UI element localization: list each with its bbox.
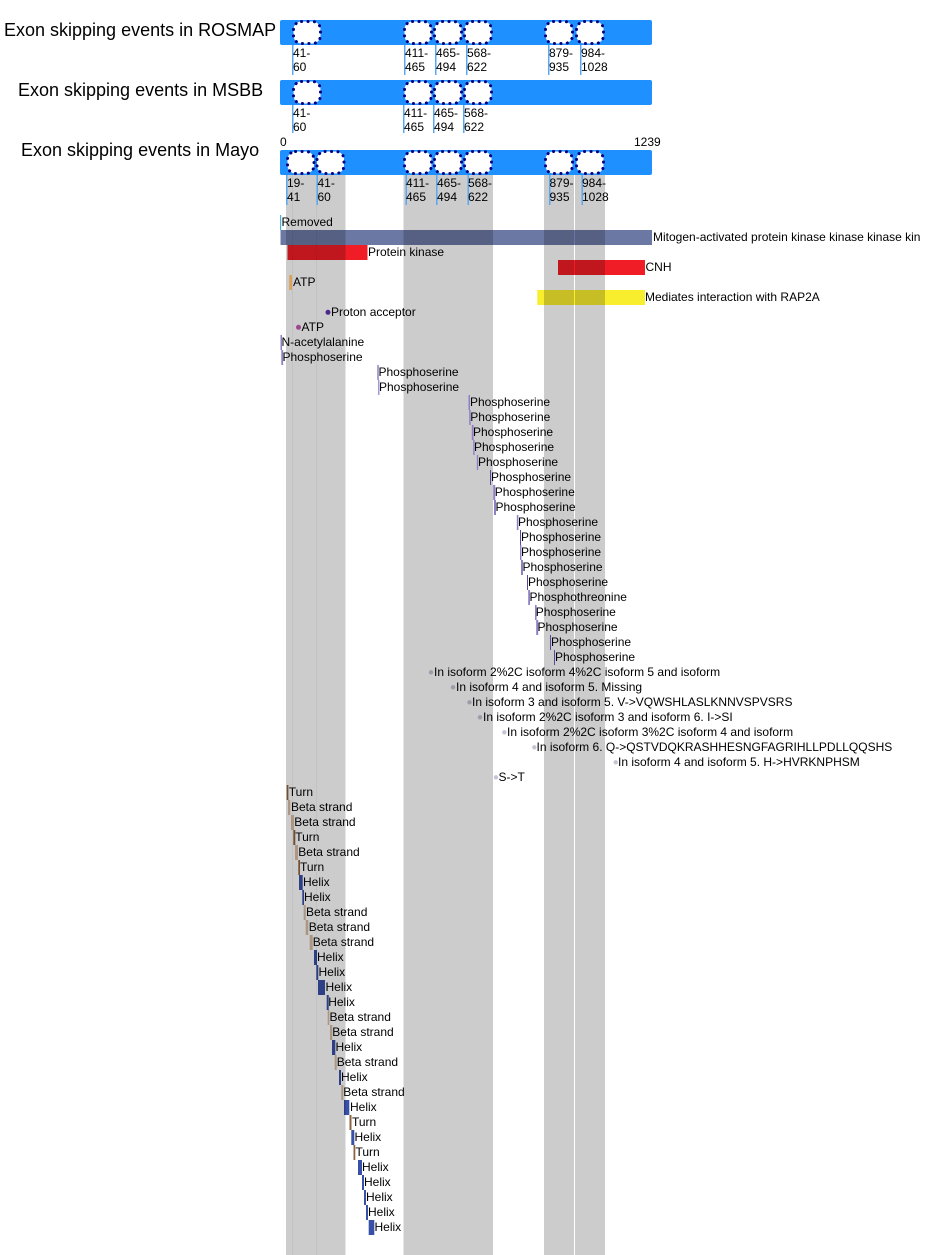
isoform variants: In isoform 2%2C isoform 4%2C isoform 5 and isoform	[434, 665, 720, 679]
title: Mayo: Exon skipping events in Mayo	[21, 140, 259, 160]
feature: CNH: CNH	[646, 260, 672, 274]
secondary structure features: Beta strand	[294, 815, 356, 829]
secondary structure features: Helix	[336, 1040, 362, 1054]
axis start label: 0	[280, 135, 287, 149]
modification sites: Phosphoserine	[522, 560, 603, 574]
track: Mayo: 622	[468, 190, 488, 204]
title: MSBB: Exon skipping events in MSBB	[18, 80, 263, 100]
track: ROSMAP: 411-	[405, 46, 428, 60]
track: MSBB: 60	[293, 120, 307, 134]
secondary structure features: Beta strand	[313, 935, 374, 949]
track: Mayo: 984-	[582, 176, 606, 190]
track: ROSMAP: 465-	[436, 46, 460, 60]
track: Mayo: 494	[437, 190, 457, 204]
track: MSBB	[280, 80, 652, 134]
secondary structure features: Helix	[366, 1190, 393, 1204]
secondary structure features: Beta strand	[291, 800, 352, 814]
modification sites: Phosphothreonine	[530, 590, 627, 604]
track: Mayo: 411-	[406, 176, 429, 190]
feature: Mediates interaction with RAP2A: Mediates interaction with RAP2A	[645, 290, 820, 304]
isoform variants: In isoform 2%2C isoform 3%2C isoform 4 and isoform	[507, 725, 793, 739]
track: Mayo: 41	[287, 190, 301, 204]
modification sites: Phosphoserine	[282, 350, 363, 364]
secondary structure features: Turn	[300, 860, 324, 874]
secondary structure features: Beta strand	[298, 845, 360, 859]
isoform variants	[429, 665, 892, 784]
track: ROSMAP: 1028	[581, 60, 608, 74]
isoform variants: In isoform 4 and isoform 5. H->HVRKNPHSM	[618, 755, 860, 769]
secondary structure features: Beta strand	[337, 1055, 398, 1069]
track: Mayo: 1028	[582, 190, 609, 204]
secondary structure features: Beta strand	[309, 920, 370, 934]
secondary structure features	[287, 785, 405, 1235]
secondary structure features: Beta strand	[343, 1085, 405, 1099]
modification sites: Phosphoserine	[521, 545, 601, 559]
track: ROSMAP: 60	[293, 60, 307, 74]
modification sites: Phosphoserine	[521, 530, 601, 544]
feature: Protein kinase: Protein kinase	[368, 245, 444, 259]
secondary structure features: Beta strand	[332, 1025, 394, 1039]
isoform variants: In isoform 3 and isoform 5. V->VQWSHLASLKNNVSPVSRS	[472, 695, 792, 709]
track: ROSMAP: 984-	[581, 46, 605, 60]
track: ROSMAP: 935	[549, 60, 569, 74]
track: Mayo: 19-	[287, 176, 304, 190]
secondary structure features: Helix	[303, 875, 330, 889]
track: MSBB: 465-	[434, 106, 458, 120]
track: Mayo: 935	[550, 190, 570, 204]
secondary structure features: Turn	[289, 785, 313, 799]
track: ROSMAP: 622	[467, 60, 487, 74]
axis end label: 1239	[634, 135, 661, 149]
track: MSBB: 41-	[293, 106, 310, 120]
isoform variants: In isoform 6. Q->QSTVDQKRASHHESNGFAGRIHLLPDLLQQSHS	[536, 740, 892, 754]
track: MSBB: 622	[464, 120, 484, 134]
secondary structure features: Helix	[374, 1220, 401, 1234]
isoform variants: In isoform 2%2C isoform 3 and isoform 6. I->SI	[483, 710, 733, 724]
feature: CNH	[558, 260, 672, 275]
secondary structure features: Turn	[356, 1145, 380, 1159]
modification sites: Phosphoserine	[473, 425, 553, 439]
secondary structure features: Beta strand	[330, 1010, 391, 1024]
modification sites: Phosphoserine	[470, 395, 550, 409]
feature: Mitogen-activated protein kinase kinase kinase kin: Mitogen-activated protein kinase kinase kinase kin	[653, 230, 920, 244]
feature: ATP site: ATP	[302, 320, 324, 334]
track: MSBB: 568-	[464, 106, 488, 120]
track: MSBB: 494	[434, 120, 454, 134]
secondary structure features: Helix	[318, 965, 345, 979]
track: ROSMAP: 879-	[549, 46, 573, 60]
secondary structure features: Helix	[368, 1205, 395, 1219]
secondary structure features: Helix	[362, 1160, 389, 1174]
modification sites: Phosphoserine	[495, 485, 575, 499]
title: ROSMAP: Exon skipping events in ROSMAP	[4, 20, 276, 40]
track: MSBB: 411-	[404, 106, 427, 120]
secondary structure features: Helix	[354, 1130, 381, 1144]
isoform variants: In isoform 4 and isoform 5. Missing	[456, 680, 642, 694]
feature: N-acetylalanine: N-acetylalanine	[282, 335, 365, 349]
secondary structure features: Helix	[326, 980, 352, 994]
secondary structure features: Turn	[352, 1115, 376, 1129]
track: ROSMAP: 465	[405, 60, 425, 74]
track: Mayo: 41-	[318, 176, 335, 190]
track: Mayo: 465-	[437, 176, 461, 190]
track: Mayo	[280, 150, 652, 205]
secondary structure features: Helix	[350, 1100, 377, 1114]
modification sites: Phosphoserine	[491, 470, 571, 484]
modification sites: Phosphoserine	[536, 605, 616, 619]
track: MSBB: 465	[404, 120, 424, 134]
modification sites: Phosphoserine	[555, 650, 635, 664]
track: ROSMAP	[280, 20, 652, 75]
feature: Protein kinase	[288, 245, 444, 260]
highlighted exon bands	[286, 175, 605, 1255]
modification sites: Phosphoserine	[528, 575, 608, 589]
secondary structure features: Beta strand	[306, 905, 367, 919]
feature: Proton acceptor: Proton acceptor	[331, 305, 416, 319]
secondary structure features: Turn	[295, 830, 319, 844]
modification sites: Phosphoserine	[551, 635, 631, 649]
secondary structure features: Helix	[317, 950, 344, 964]
modification sites: Phosphoserine	[478, 455, 558, 469]
secondary structure features: Helix	[364, 1175, 391, 1189]
track: ROSMAP: 41-	[293, 46, 310, 60]
modification sites	[281, 350, 635, 665]
track: ROSMAP: 568-	[467, 46, 491, 60]
secondary structure features: Helix	[328, 995, 355, 1009]
track: Mayo: 60	[318, 190, 331, 204]
modification sites: Phosphoserine	[474, 440, 554, 454]
secondary structure features: Helix	[304, 890, 331, 904]
isoform variants: S->T	[498, 770, 526, 784]
secondary structure features: Helix	[341, 1070, 368, 1084]
feature: Mitogen-activated protein kinase kinase kinase kin	[280, 230, 920, 245]
modification sites: Phosphoserine	[470, 410, 551, 424]
feature: Mediates interaction with RAP2A	[537, 290, 820, 305]
track: ROSMAP: 494	[436, 60, 456, 74]
modification sites: Phosphoserine	[379, 380, 459, 394]
modification sites: Phosphoserine	[496, 500, 576, 514]
modification sites: Phosphoserine	[518, 515, 598, 529]
track: Mayo: 465	[406, 190, 426, 204]
track: Mayo: 879-	[550, 176, 574, 190]
modification sites: Phosphoserine	[538, 620, 618, 634]
track: Mayo: 568-	[468, 176, 492, 190]
modification sites: Phosphoserine	[378, 365, 459, 379]
feature: ATP binding: ATP	[293, 275, 315, 289]
feature: Removed: Removed	[282, 215, 333, 229]
